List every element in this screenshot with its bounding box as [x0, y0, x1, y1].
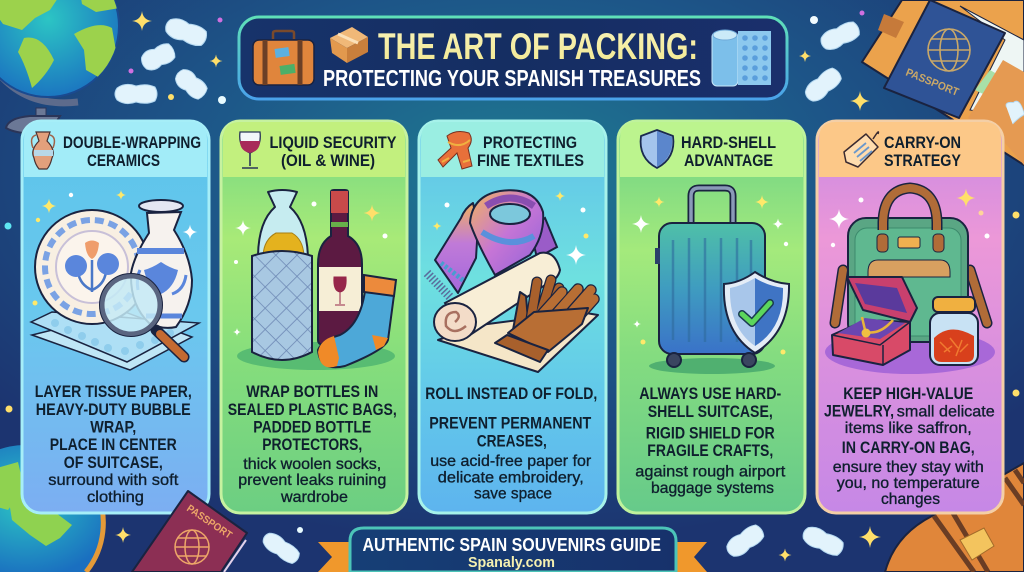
body text: PLACE IN CENTER	[50, 436, 177, 454]
heading: STRATEGY	[884, 152, 961, 170]
body text: thick woolen socks,	[243, 456, 381, 473]
panel: protecting fine textiles	[419, 121, 606, 513]
illustration: suitcase bottom right	[885, 463, 1024, 572]
body text: WRAP BOTTLES IN	[246, 383, 378, 401]
heading: PROTECTING	[483, 134, 577, 152]
body text: WRAP,	[90, 418, 136, 436]
body text: HEAVY-DUTY BUBBLE	[36, 401, 191, 419]
icon: amphora	[32, 132, 54, 169]
title text: THE ART OF PACKING:	[378, 26, 698, 67]
heading: FINE TEXTILES	[477, 152, 584, 170]
panel: liquid security	[221, 121, 407, 513]
body text: PROTECTORS,	[262, 436, 362, 454]
subtitle text: PROTECTING YOUR SPANISH TREASURES	[323, 65, 701, 91]
heading: CARRY-ON	[884, 134, 961, 152]
body text: ROLL INSTEAD OF FOLD,	[425, 385, 597, 403]
body text: RIGID SHIELD FOR	[646, 424, 775, 442]
body text: PREVENT PERMANENT	[429, 414, 591, 432]
body text: KEEP HIGH-VALUE	[843, 385, 973, 403]
footer url: Spanaly.com	[468, 555, 555, 571]
body text: changes	[881, 491, 940, 508]
icon: scarf	[438, 132, 472, 169]
body text: JEWELRY,	[824, 402, 894, 420]
body text: use acid-free paper for	[430, 453, 592, 470]
body text: OF SUITCASE,	[64, 454, 163, 472]
illustration: ceramics and bubble wrap	[31, 190, 199, 370]
illustration: bottles and sock	[233, 190, 396, 370]
illustration: bag, jewelry box and saffron jar	[825, 188, 995, 374]
body text: save space	[474, 486, 552, 502]
heading: DOUBLE-WRAPPING	[63, 134, 201, 152]
body text: wardrobe	[280, 489, 348, 506]
heading: (OIL & WINE)	[281, 152, 375, 170]
body text: ALWAYS USE HARD-	[639, 385, 781, 403]
body text: surround with soft	[48, 472, 179, 489]
illustration: scarf, paper roll and gloves	[427, 190, 598, 372]
body text: PADDED BOTTLE	[253, 418, 371, 436]
icon: suitcase	[253, 31, 314, 85]
illustration: globe bottom left	[0, 445, 103, 572]
body text: clothing	[87, 489, 144, 506]
illustration: globe top left	[0, 0, 120, 133]
icon: shield	[641, 130, 673, 168]
body text: against rough airport	[635, 464, 786, 480]
body text: SHELL SUITCASE,	[648, 403, 773, 421]
footer banner	[318, 528, 707, 572]
icon: wine glass	[240, 132, 260, 168]
icon: luggage tag	[844, 132, 878, 167]
panel: hard-shell advantage	[618, 121, 805, 513]
body text: FRAGILE CRAFTS,	[647, 442, 773, 460]
heading: LIQUID SECURITY	[270, 134, 396, 152]
body text: ensure they stay with	[833, 459, 984, 476]
illustration: passport bottom	[132, 491, 247, 572]
body text: IN CARRY-ON BAG,	[842, 439, 975, 457]
heading: CERAMICS	[87, 152, 160, 170]
panel: double-wrapping ceramics	[22, 121, 209, 513]
body text: SEALED PLASTIC BAGS,	[228, 401, 397, 419]
illustration: passport and wallet top right	[862, 0, 1024, 165]
heading: HARD-SHELL	[681, 134, 776, 152]
heading: ADVANTAGE	[684, 152, 773, 170]
body text: delicate embroidery,	[438, 470, 584, 486]
icon: bubble wrap roll	[712, 30, 771, 86]
panel: carry-on strategy	[817, 121, 1003, 513]
footer title: AUTHENTIC SPAIN SOUVENIRS GUIDE	[362, 535, 661, 555]
illustration: passport bottom: PASSPORT	[184, 503, 235, 542]
body text: prevent leaks ruining	[238, 472, 386, 489]
title banner	[239, 17, 787, 99]
body text: CREASES,	[477, 432, 547, 450]
illustration: passport and wallet top right: PASSPORT	[904, 67, 961, 99]
body text: small delicate	[897, 404, 995, 420]
body text: items like saffron,	[845, 420, 972, 437]
icon: cardboard box	[330, 27, 368, 63]
body text: you, no temperature	[837, 475, 980, 492]
body text: baggage systems	[651, 480, 774, 497]
body text: LAYER TISSUE PAPER,	[35, 383, 192, 401]
illustration: hard-shell suitcase and shield	[632, 188, 789, 374]
